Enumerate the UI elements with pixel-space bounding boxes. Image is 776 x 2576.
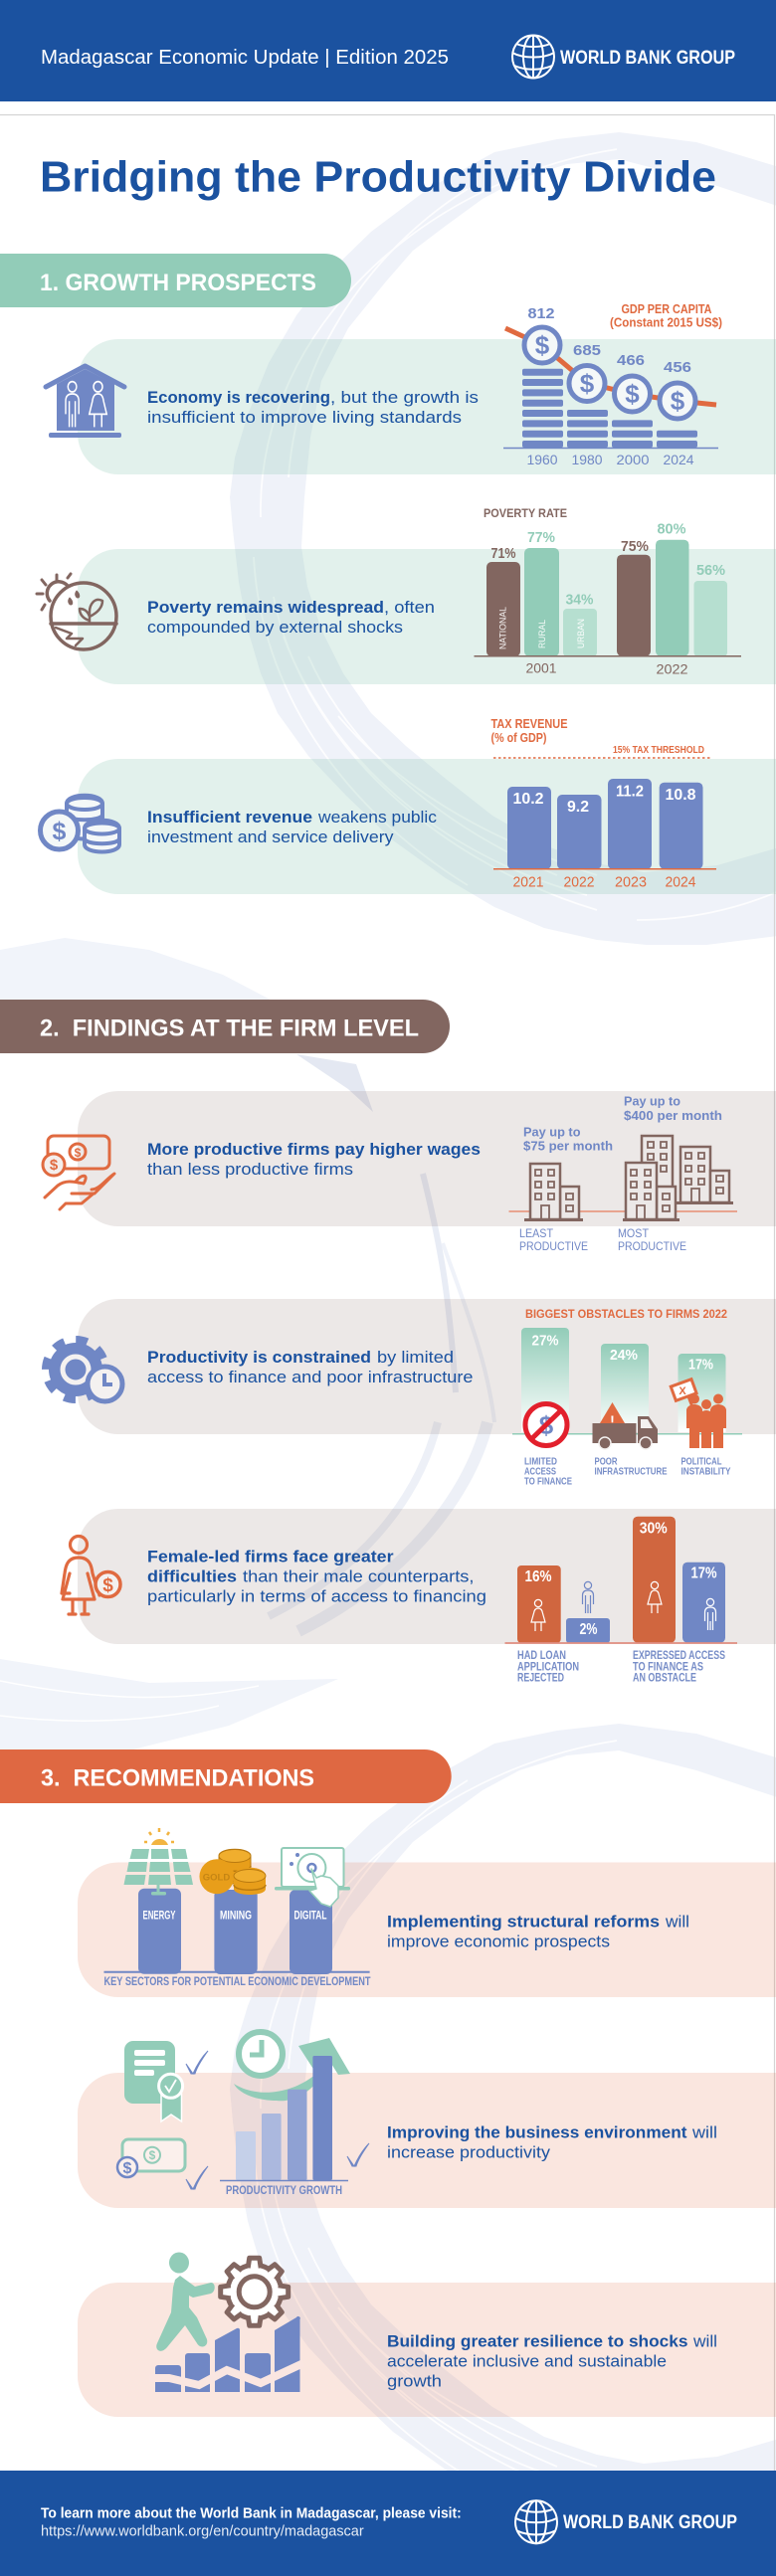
icon: protesters	[671, 1380, 726, 1448]
chart: biggest obstacles: POOR	[595, 1457, 618, 1468]
chart: wages by firm productivity: PRODUCTIVE	[519, 1239, 588, 1253]
text block: Implementing structural reforms	[387, 1912, 660, 1931]
panel: resilience	[78, 2252, 776, 2417]
text block	[147, 1348, 474, 1386]
chart: poverty rate: 77%	[527, 529, 555, 546]
chart: tax revenue: 15% TAX THRESHOLD	[613, 744, 704, 756]
icon: no dollar: $	[539, 1410, 554, 1440]
chart: gender gaps in finance	[505, 1517, 737, 1685]
chart: gender gaps in finance: 2%	[579, 1621, 597, 1638]
chart: tax revenue: (% of GDP)	[491, 730, 547, 745]
text block: difficulties	[147, 1567, 237, 1586]
text block	[147, 1548, 486, 1606]
chart: GDP per capita: $	[580, 368, 595, 398]
chart: biggest obstacles: 27%	[531, 1333, 559, 1350]
World Bank Group logo	[512, 36, 735, 78]
text block: More productive firms pay higher wages	[147, 1140, 481, 1159]
header title: Madagascar Economic Update | Edition 2025	[41, 47, 449, 69]
section heading: firm level	[0, 1000, 450, 1053]
chart: tax revenue: 10.2	[513, 791, 544, 808]
text block: increase productivity	[387, 2142, 551, 2161]
chart: wages by firm productivity: $75 per month	[523, 1139, 613, 1154]
panel: wages	[43, 1091, 776, 1253]
section heading: growth prospects: 1. GROWTH PROSPECTS	[40, 270, 316, 296]
panel: poverty	[37, 508, 776, 684]
text block	[147, 808, 437, 846]
chart: GDP per capita: 456	[664, 359, 691, 376]
section heading: firm level: 2. FINDINGS AT THE FIRM LEVEL	[40, 1015, 419, 1042]
text block	[387, 2122, 717, 2161]
icon: truck with warning: !	[610, 1412, 615, 1428]
chart: wages by firm productivity	[509, 1094, 737, 1253]
chart: GDP per capita: 2000	[617, 452, 650, 467]
text block: Economy is recovering	[147, 388, 330, 407]
chart: poverty rate	[474, 508, 741, 677]
text block: by limited	[377, 1348, 454, 1367]
icon: woman with coin	[62, 1536, 120, 1614]
background brush swirl 3	[230, 1724, 776, 2536]
chart: poverty rate: RURAL	[537, 620, 547, 648]
chart: biggest obstacles: 17%	[688, 1357, 713, 1374]
chart: poverty rate: 34%	[565, 592, 593, 609]
text block: than their male counterparts,	[243, 1567, 474, 1586]
chart: gender gaps in finance: 17%	[690, 1565, 716, 1582]
header band	[0, 0, 776, 101]
chart: productivity growth	[220, 2032, 350, 2197]
background brush swirl 2	[0, 938, 494, 1752]
chart: wages by firm productivity: $400 per month	[624, 1108, 722, 1123]
icon: person pushing gear up steps	[149, 2252, 303, 2392]
chart: GDP per capita: 812	[527, 305, 555, 322]
panel: female-led firms: $	[102, 1575, 113, 1596]
chart: GDP per capita: 685	[573, 342, 601, 359]
chart: GDP per capita: $	[625, 379, 640, 409]
icon: laptop and hand	[275, 1848, 350, 1907]
chart: GDP per capita: 1960	[527, 452, 558, 467]
panel: economy recovering	[46, 302, 776, 474]
chart: GDP per capita: $	[535, 330, 550, 360]
chart: wages by firm productivity: MOST	[618, 1226, 650, 1240]
chart: biggest obstacles: INSTABILITY	[680, 1467, 731, 1478]
icon: climate shocks	[37, 574, 116, 649]
chart: GDP per capita: 466	[617, 352, 645, 369]
text block: , often	[384, 598, 435, 617]
panel: wages: $	[75, 1146, 82, 1160]
icon: solar panel and sun	[123, 1828, 193, 1896]
text block	[387, 1912, 689, 1950]
footer text	[41, 2505, 462, 2539]
chart: GDP per capita: $	[671, 386, 685, 416]
text block: investment and service delivery	[147, 828, 394, 846]
text block	[147, 388, 479, 427]
chart: wages by firm productivity: Pay up to	[624, 1094, 680, 1109]
text block: Building greater resilience to shocks	[387, 2331, 688, 2350]
icon: certificate	[124, 2041, 183, 2121]
panel: business environment	[78, 2032, 776, 2208]
chart: key sectors	[103, 1828, 370, 1988]
chart: tax revenue: 2021	[513, 875, 543, 891]
chart: productivity growth: PRODUCTIVITY GROWTH	[226, 2185, 342, 2197]
panel: insufficient revenue	[40, 716, 776, 894]
icon: money note: $	[149, 2148, 156, 2162]
icon: coins	[40, 796, 119, 851]
chart: tax revenue: 2022	[563, 875, 595, 891]
panel: female-led firms	[62, 1509, 776, 1685]
text block: improve economic prospects	[387, 1932, 610, 1950]
chart: poverty rate: 56%	[696, 562, 725, 579]
footer text: https://www.worldbank.org/en/country/madagascar	[41, 2522, 364, 2539]
text block	[147, 1140, 481, 1179]
chart: poverty rate: 75%	[621, 538, 649, 555]
chart: poverty rate: 2001	[525, 660, 557, 676]
chart: biggest obstacles: 24%	[610, 1347, 638, 1364]
chart: wages by firm productivity: LEAST	[519, 1226, 554, 1240]
icon: house with people	[46, 366, 124, 438]
text block	[387, 2331, 717, 2390]
text block: access to finance and poor infrastructure	[147, 1368, 474, 1386]
chart: tax revenue: 2023	[615, 875, 647, 891]
icon: money note: $	[123, 2160, 132, 2177]
chart: biggest obstacles: POLITICAL	[680, 1457, 722, 1468]
chart: GDP per capita: 1980	[571, 452, 603, 467]
icon: gear and clock	[46, 1340, 122, 1401]
text block: insufficient to improve living standards	[147, 408, 462, 427]
footer band	[0, 2471, 776, 2576]
text block: Productivity is constrained	[147, 1348, 371, 1367]
chart: key sectors: DIGITAL	[294, 1910, 326, 1922]
text block: weakens public	[317, 808, 437, 827]
chart: poverty rate: URBAN	[576, 619, 586, 648]
chart: key sectors: ENERGY	[143, 1910, 176, 1922]
chart: GDP per capita	[503, 302, 722, 467]
icon: check mark	[186, 2166, 208, 2189]
chart: gender gaps in finance: HAD LOAN	[517, 1650, 566, 1662]
World Bank Group logo: WORLD BANK GROUP	[560, 48, 735, 69]
background brush swirl 1	[230, 132, 776, 945]
chart: poverty rate: 2022	[657, 661, 688, 677]
footer text: To learn more about the World Bank in Madagascar, please visit:	[41, 2505, 462, 2522]
chart: poverty rate: NATIONAL	[497, 607, 507, 649]
chart: key sectors: KEY SECTORS FOR POTENTIAL ECONOMIC DEVELOPMENT	[103, 1976, 370, 1988]
text block: particularly in terms of access to financing	[147, 1587, 486, 1606]
chart: gender gaps in finance: 16%	[525, 1568, 551, 1585]
chart: gender gaps in finance: 30%	[640, 1521, 668, 1538]
chart: GDP per capita: (Constant 2015 US$)	[610, 316, 722, 330]
chart: tax revenue: 9.2	[567, 799, 589, 816]
chart: wages by firm productivity: PRODUCTIVE	[618, 1239, 686, 1253]
chart: tax revenue: 11.2	[616, 784, 644, 801]
chart: biggest obstacles	[512, 1307, 742, 1488]
text block: , but the growth is	[330, 388, 479, 407]
chart: gender gaps in finance: EXPRESSED ACCESS	[633, 1650, 725, 1662]
text block	[147, 598, 435, 637]
icon: check mark	[186, 2051, 208, 2074]
icon: money in hand	[43, 1136, 114, 1209]
section heading: recommendations: 3. RECOMMENDATIONS	[41, 1765, 314, 1792]
chart: biggest obstacles: ACCESS	[524, 1467, 556, 1478]
text block: Improving the business environment	[387, 2122, 687, 2141]
chart: gender gaps in finance: AN OBSTACLE	[633, 1673, 696, 1685]
panel: structural reforms	[78, 1828, 776, 1997]
chart: tax revenue: 10.8	[665, 787, 696, 804]
World Bank Group logo	[515, 2500, 737, 2543]
text block: Poverty remains widespread	[147, 598, 384, 617]
icon: coins: $	[53, 818, 67, 845]
chart: biggest obstacles: TO FINANCE	[524, 1476, 572, 1488]
chart: gender gaps in finance: TO FINANCE AS	[633, 1662, 703, 1674]
icon: gold coins: GOLD	[203, 1872, 230, 1884]
chart: gender gaps in finance: REJECTED	[517, 1673, 564, 1685]
panel: productivity constraints	[46, 1299, 776, 1488]
text block: growth	[387, 2371, 442, 2390]
chart: biggest obstacles: LIMITED	[524, 1457, 557, 1468]
chart: biggest obstacles: BIGGEST OBSTACLES TO FIRMS 2022	[525, 1307, 727, 1321]
icon: check mark	[347, 2143, 369, 2166]
World Bank Group logo: WORLD BANK GROUP	[563, 2512, 737, 2533]
icon: gold coins	[199, 1849, 266, 1895]
title: Bridging the Productivity Divide	[40, 153, 716, 201]
icon: no dollar	[525, 1404, 567, 1446]
chart: biggest obstacles: INFRASTRUCTURE	[595, 1467, 668, 1478]
chart: poverty rate: 80%	[657, 521, 686, 538]
section heading: growth prospects	[0, 254, 351, 307]
chart: GDP per capita: GDP PER CAPITA	[621, 302, 712, 316]
text block: will	[692, 2331, 717, 2350]
text block: will	[665, 1912, 689, 1931]
section heading: recommendations	[0, 1749, 452, 1803]
chart: key sectors: MINING	[220, 1910, 252, 1922]
chart: GDP per capita: 2024	[663, 452, 694, 467]
icon: protesters: X	[679, 1385, 686, 1397]
chart: wages by firm productivity: Pay up to	[523, 1125, 581, 1140]
chart: tax revenue: 2024	[665, 875, 696, 891]
text block: Insufficient revenue	[147, 808, 312, 827]
icon: money note	[117, 2139, 185, 2177]
chart: tax revenue	[491, 716, 716, 891]
text block: will	[691, 2122, 717, 2141]
chart: gender gaps in finance: APPLICATION	[517, 1662, 579, 1674]
chart: tax revenue: TAX REVENUE	[491, 716, 568, 731]
chart: poverty rate: 71%	[491, 545, 515, 562]
panel: wages: $	[50, 1157, 59, 1174]
icon: truck with warning	[593, 1402, 658, 1449]
text block: than less productive firms	[147, 1160, 353, 1179]
text block: accelerate inclusive and sustainable	[387, 2351, 667, 2370]
chart: poverty rate: POVERTY RATE	[484, 508, 567, 520]
text block: Female-led firms face greater	[147, 1548, 394, 1566]
text block: compounded by external shocks	[147, 618, 403, 637]
